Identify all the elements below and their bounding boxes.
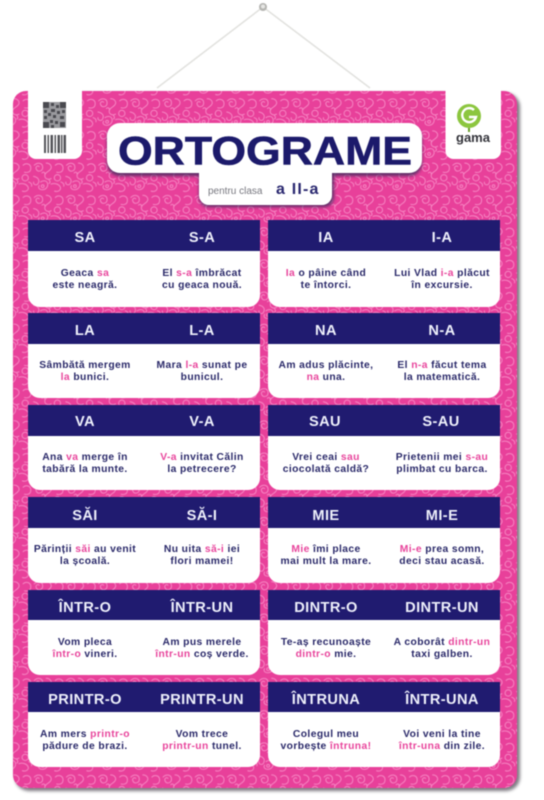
panel: NA / N-A: [268, 313, 500, 398]
subtitle: a II-a: [276, 181, 320, 198]
panel: SA / S-A: SA: [74, 230, 96, 246]
panel: VA / V-A: Ana va merge în: [42, 452, 128, 463]
panel: DINTR-O / DINTR-UN: taxi galben.: [411, 649, 473, 660]
panel: SAU / S-AU: SAU: [309, 414, 341, 430]
panel: SAU / S-AU: plimbat cu barca.: [396, 464, 488, 475]
panel: VA / V-A: VA: [75, 414, 95, 430]
panel: IA / I-A: te întorci.: [301, 280, 351, 291]
panel: IA / I-A: Lui Vlad i-a plăcut: [394, 268, 490, 279]
icon: gama logo mark: [457, 104, 481, 132]
panel: VA / V-A: [28, 405, 260, 490]
panel: ÎNTR-O / ÎNTR-UN: ÎNTR-UN: [170, 598, 233, 616]
panel: SA / S-A: este neagră.: [53, 280, 117, 291]
panel: MIE / MI-E: MIE: [312, 508, 340, 524]
panel: NA / N-A: la matematică.: [404, 372, 480, 383]
panel: MIE / MI-E: Mie îmi place: [291, 544, 361, 555]
panel: ÎNTR-O / ÎNTR-UN: [28, 590, 260, 675]
subtitle: pentru clasa: [208, 186, 265, 197]
panel: SĂI / SĂ-I: SĂI: [72, 507, 98, 524]
panel: VA / V-A: V-a invitat Călin: [160, 452, 244, 463]
logo wordmark: gama: [456, 130, 491, 145]
panel: LA / L-A: la bunici.: [61, 372, 109, 383]
icon: QR code: [43, 102, 66, 128]
panel: QR and barcode tab: [28, 88, 82, 159]
panel: ÎNTR-O / ÎNTR-UN: într-un coș verde.: [154, 649, 249, 660]
icon: wall hook and hanging string: [157, 3, 370, 88]
panel: SAU / S-AU: Vrei ceai sau: [292, 452, 360, 463]
panel: SĂI / SĂ-I: SĂ-I: [187, 507, 217, 524]
panel: ÎNTRUNA / ÎNTR-UNA: într-una din zile.: [398, 741, 485, 752]
panel: ÎNTRUNA / ÎNTR-UNA: [268, 682, 500, 767]
panel: LA / L-A: [28, 313, 260, 398]
panel: ÎNTRUNA / ÎNTR-UNA: ÎNTRUNA: [291, 690, 360, 708]
panel: SA / S-A: S-A: [189, 230, 215, 246]
panel: MIE / MI-E: [268, 497, 500, 583]
panel: PRINTR-O / PRINTR-UN: printr-un tunel.: [162, 741, 242, 752]
panel: PRINTR-O / PRINTR-UN: Vom trece: [176, 729, 228, 740]
panel: LA / L-A: LA: [75, 323, 95, 339]
panel: LA / L-A: Sâmbătă mergem: [39, 360, 131, 371]
panel: ÎNTR-O / ÎNTR-UN: Am pus merele: [162, 637, 242, 648]
panel: NA / N-A: N-A: [428, 323, 456, 339]
panel: publisher logo tab: [446, 88, 501, 159]
panel: SA / S-A: El s-a îmbrăcat: [162, 268, 242, 279]
panel: IA / I-A: IA: [318, 230, 334, 246]
panel: LA / L-A: L-A: [189, 323, 215, 339]
panel: ÎNTRUNA / ÎNTR-UNA: ÎNTR-UNA: [404, 690, 479, 708]
panel: NA / N-A: Am adus plăcinte,: [279, 360, 373, 371]
panel: SĂI / SĂ-I: Nu uita să-i iei: [164, 544, 240, 555]
panel: PRINTR-O / PRINTR-UN: [28, 682, 260, 767]
panel: VA / V-A: la petrecere?: [167, 464, 237, 475]
panel: PRINTR-O / PRINTR-UN: PRINTR-O: [48, 692, 122, 708]
panel: PRINTR-O / PRINTR-UN: Am mers printr-o: [40, 729, 130, 740]
panel: ÎNTR-O / ÎNTR-UN: într-o vineri.: [51, 649, 118, 660]
icon: barcode: [44, 135, 66, 153]
panel: SĂI / SĂ-I: [28, 497, 260, 583]
panel: IA / I-A: în excursie.: [410, 280, 473, 291]
panel: ÎNTRUNA / ÎNTR-UNA: vorbește întruna!: [281, 741, 371, 752]
panel: DINTR-O / DINTR-UN: Te-aș recunoaște: [281, 637, 371, 648]
panel: NA / N-A: El n-a făcut tema: [397, 360, 487, 371]
panel: IA / I-A: I-A: [432, 230, 452, 246]
panel: DINTR-O / DINTR-UN: dintr-o mie.: [296, 649, 356, 660]
panel: DINTR-O / DINTR-UN: DINTR-O: [294, 600, 358, 616]
panel: SAU / S-AU: Prietenii mei s-au: [396, 452, 488, 463]
panel: SA / S-A: cu geaca nouă.: [162, 280, 242, 291]
panel: LA / L-A: Mara l-a sunat pe: [157, 360, 247, 371]
panel: ÎNTRUNA / ÎNTR-UNA: Voi veni la tine: [403, 729, 481, 740]
panel: PRINTR-O / PRINTR-UN: PRINTR-UN: [160, 692, 244, 708]
panel: SAU / S-AU: [268, 405, 500, 490]
panel: MIE / MI-E: Mi-e prea somn,: [400, 544, 484, 555]
panel: SAU / S-AU: S-AU: [422, 414, 460, 430]
panel: NA / N-A: na una.: [307, 372, 345, 383]
panel: PRINTR-O / PRINTR-UN: pădure de brazi.: [42, 741, 128, 752]
panel: SA / S-A: [28, 220, 260, 307]
panel: MIE / MI-E: mai mult la mare.: [281, 556, 371, 567]
panel: VA / V-A: tabără la munte.: [42, 464, 128, 475]
panel: DINTR-O / DINTR-UN: [268, 590, 500, 675]
title: ORTOGRAME: [118, 130, 412, 174]
panel: ÎNTR-O / ÎNTR-UN: Vom pleca: [58, 637, 112, 648]
panel: SĂI / SĂ-I: la școală.: [60, 556, 110, 567]
panel: VA / V-A: V-A: [189, 414, 215, 430]
panel: MIE / MI-E: deci stau acasă.: [399, 556, 485, 567]
panel: SĂI / SĂ-I: flori mamei!: [170, 556, 234, 567]
title plate with heading: [107, 123, 422, 207]
panel: IA / I-A: [268, 220, 500, 307]
panel: LA / L-A: bunicul.: [181, 372, 223, 383]
panel: SAU / S-AU: ciocolată caldă?: [283, 464, 369, 475]
panel: SA / S-A: Geaca sa: [61, 268, 109, 279]
panel: NA / N-A: NA: [315, 323, 337, 339]
panel: ÎNTR-O / ÎNTR-UN: ÎNTR-O: [58, 598, 111, 616]
panel: DINTR-O / DINTR-UN: A coborât dintr-un: [394, 637, 490, 648]
panel: DINTR-O / DINTR-UN: DINTR-UN: [405, 600, 479, 616]
panel: IA / I-A: Ia o pâine când: [286, 268, 366, 279]
panel: MIE / MI-E: MI-E: [426, 508, 458, 524]
panel: ÎNTRUNA / ÎNTR-UNA: Colegul meu: [293, 729, 359, 740]
panel: SĂI / SĂ-I: Părinții săi au venit: [34, 544, 136, 555]
